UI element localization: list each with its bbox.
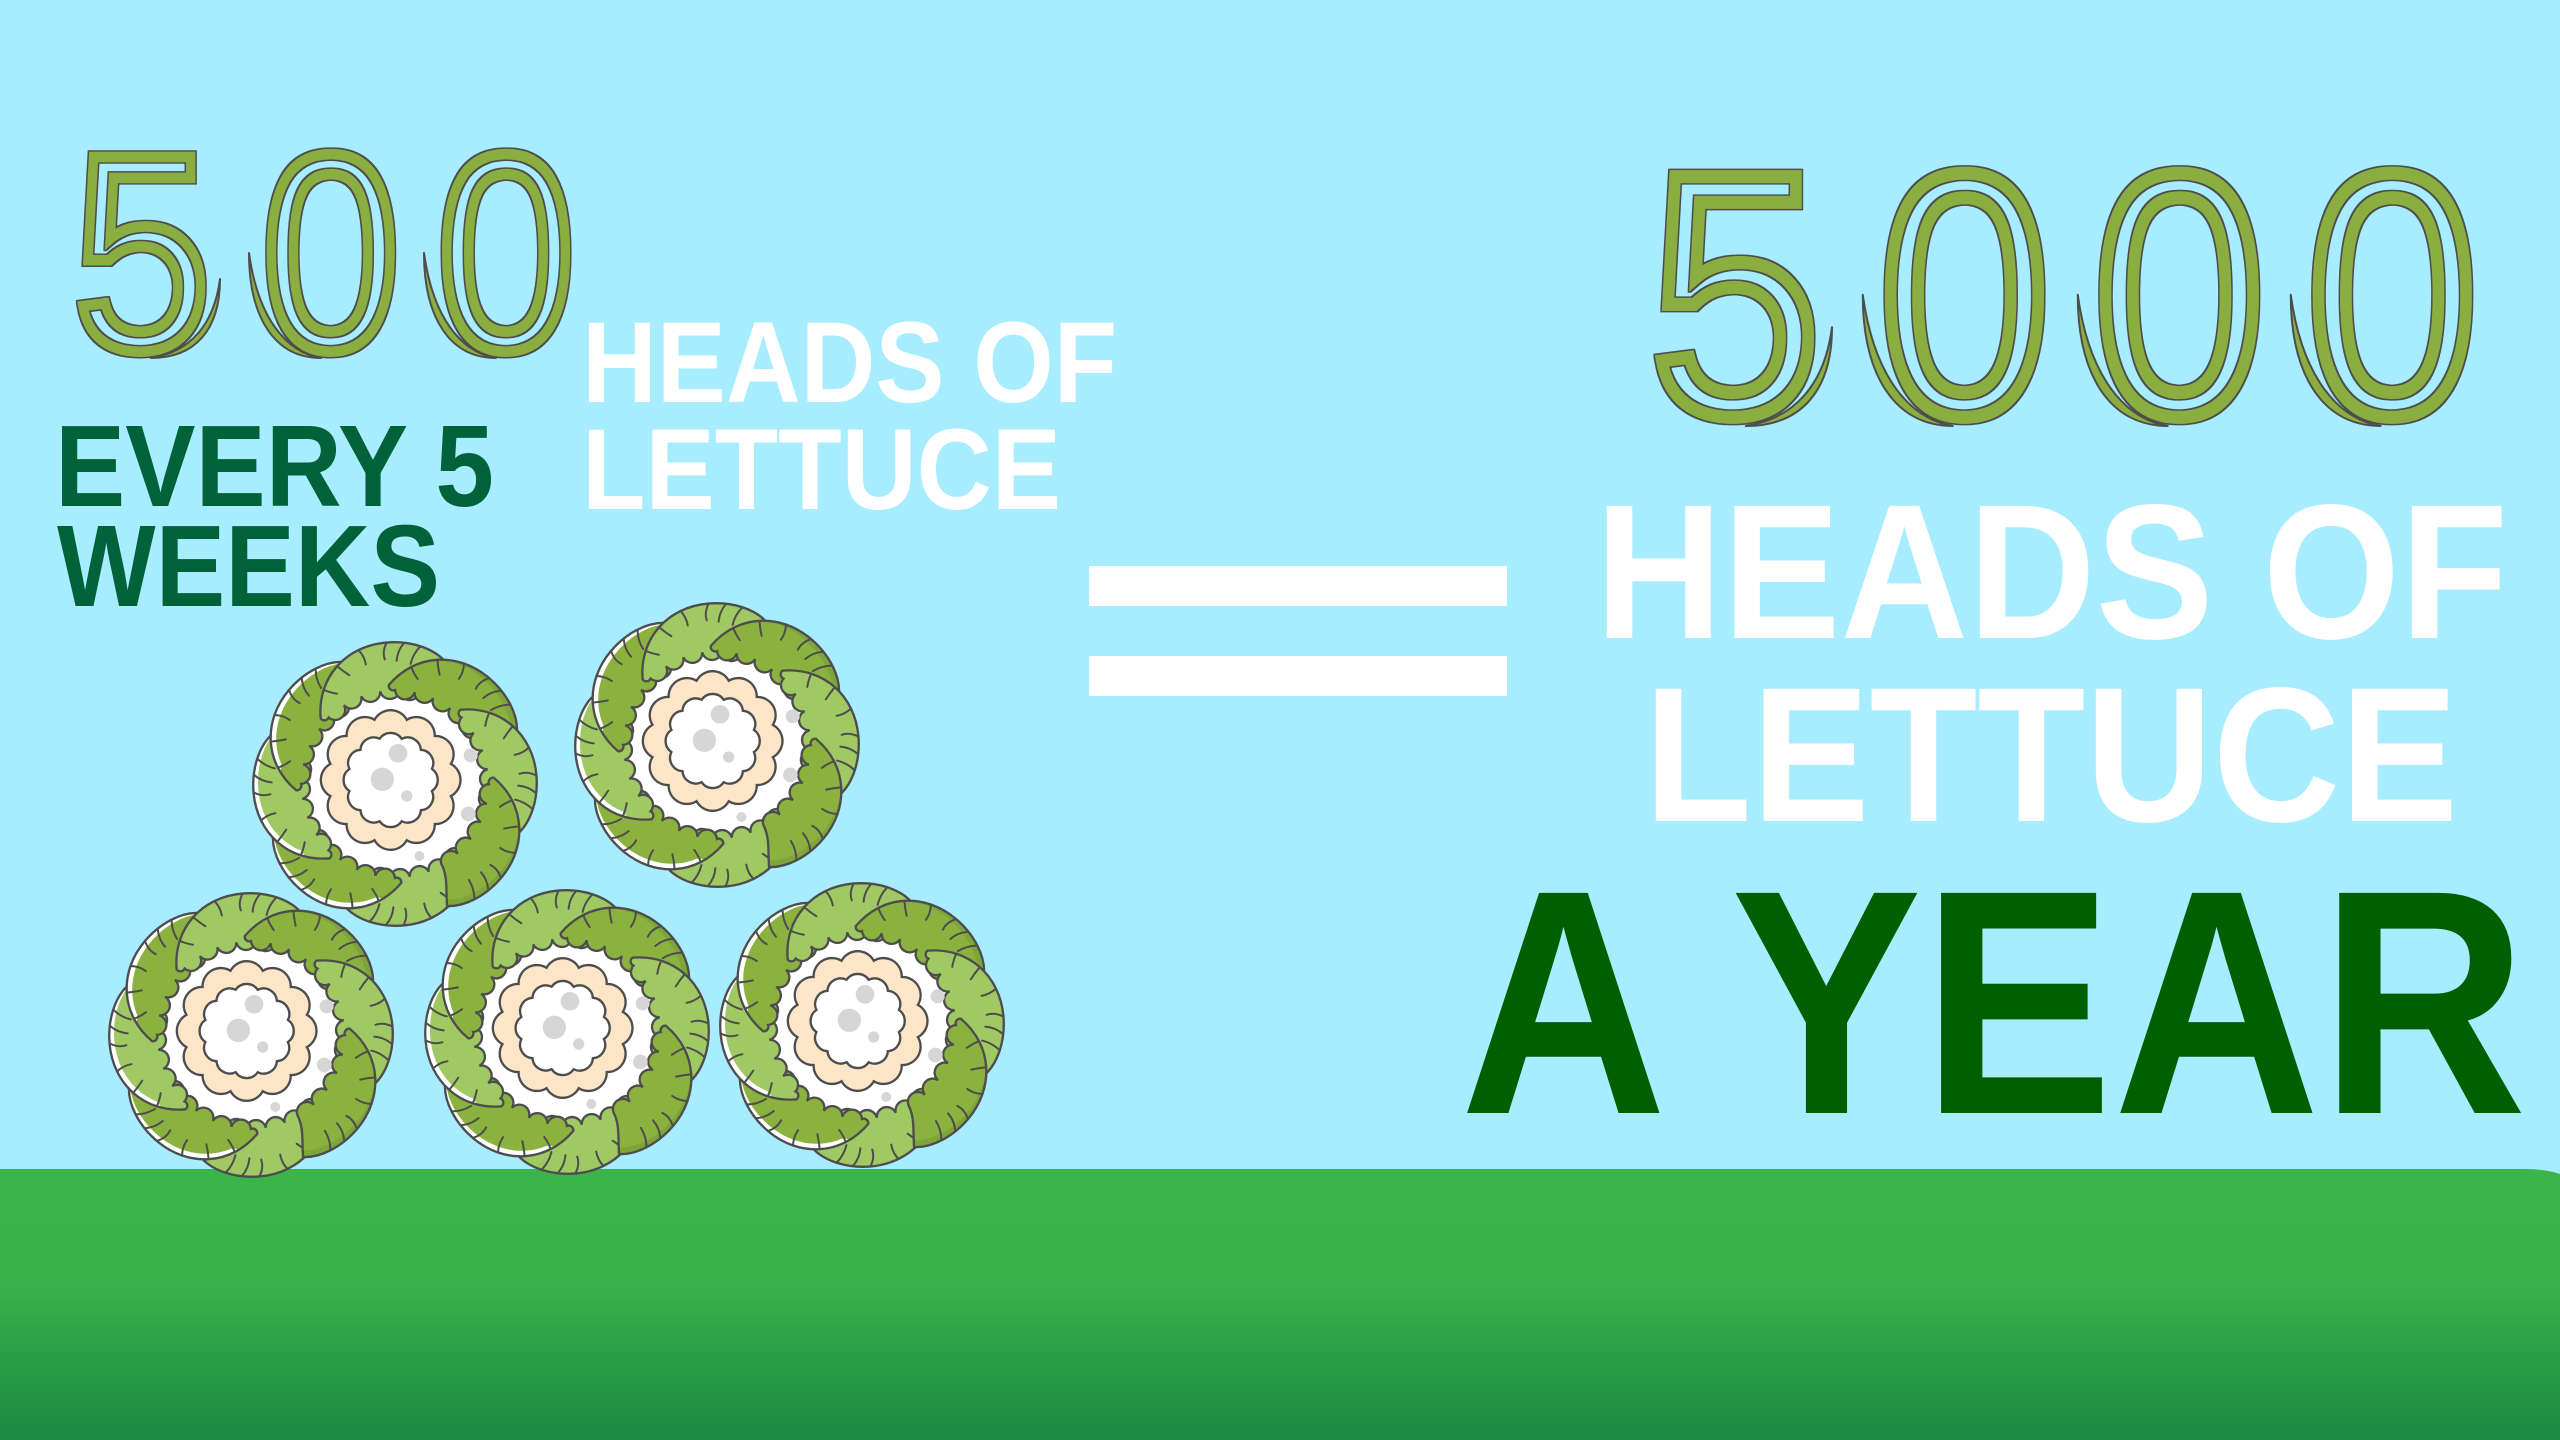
number: 500 [73, 97, 575, 408]
text: heads of lettuce (small): HEADS OF [582, 299, 1117, 427]
number: 5000: 5 [1649, 103, 1821, 488]
text: every 5 weeks: WEEKS [57, 501, 440, 631]
text: heads of lettuce (large): LETTUCE [1644, 647, 2458, 862]
text: every 5 weeks: EVERY 5 [55, 401, 494, 531]
number: 500: 5 [73, 97, 211, 408]
text: heads of lettuce (large): HEADS OF [1595, 464, 2508, 679]
icon: lettuce bottom middle [385, 850, 749, 1214]
number: 500: 0 [262, 97, 400, 408]
number: 5000 [1649, 103, 2478, 488]
text: heads of lettuce (small) [582, 299, 1117, 534]
number: 500: 0 [437, 97, 575, 408]
text: heads of lettuce (large) [1595, 464, 2508, 862]
number: 5000: 0 [2093, 103, 2265, 488]
icon: lettuce bottom right [680, 843, 1044, 1207]
icon: lettuce bottom left [69, 853, 433, 1217]
icon: lettuce top left [213, 602, 577, 966]
icon: lettuce top right [535, 563, 899, 927]
ground [0, 1169, 2560, 1440]
number: 5000: 0 [1879, 103, 2050, 488]
number: 5000: 0 [2306, 103, 2478, 488]
text: heads of lettuce (small): LETTUCE [582, 406, 1061, 534]
equals sign [1089, 566, 1507, 696]
text: every 5 weeks [55, 401, 494, 631]
